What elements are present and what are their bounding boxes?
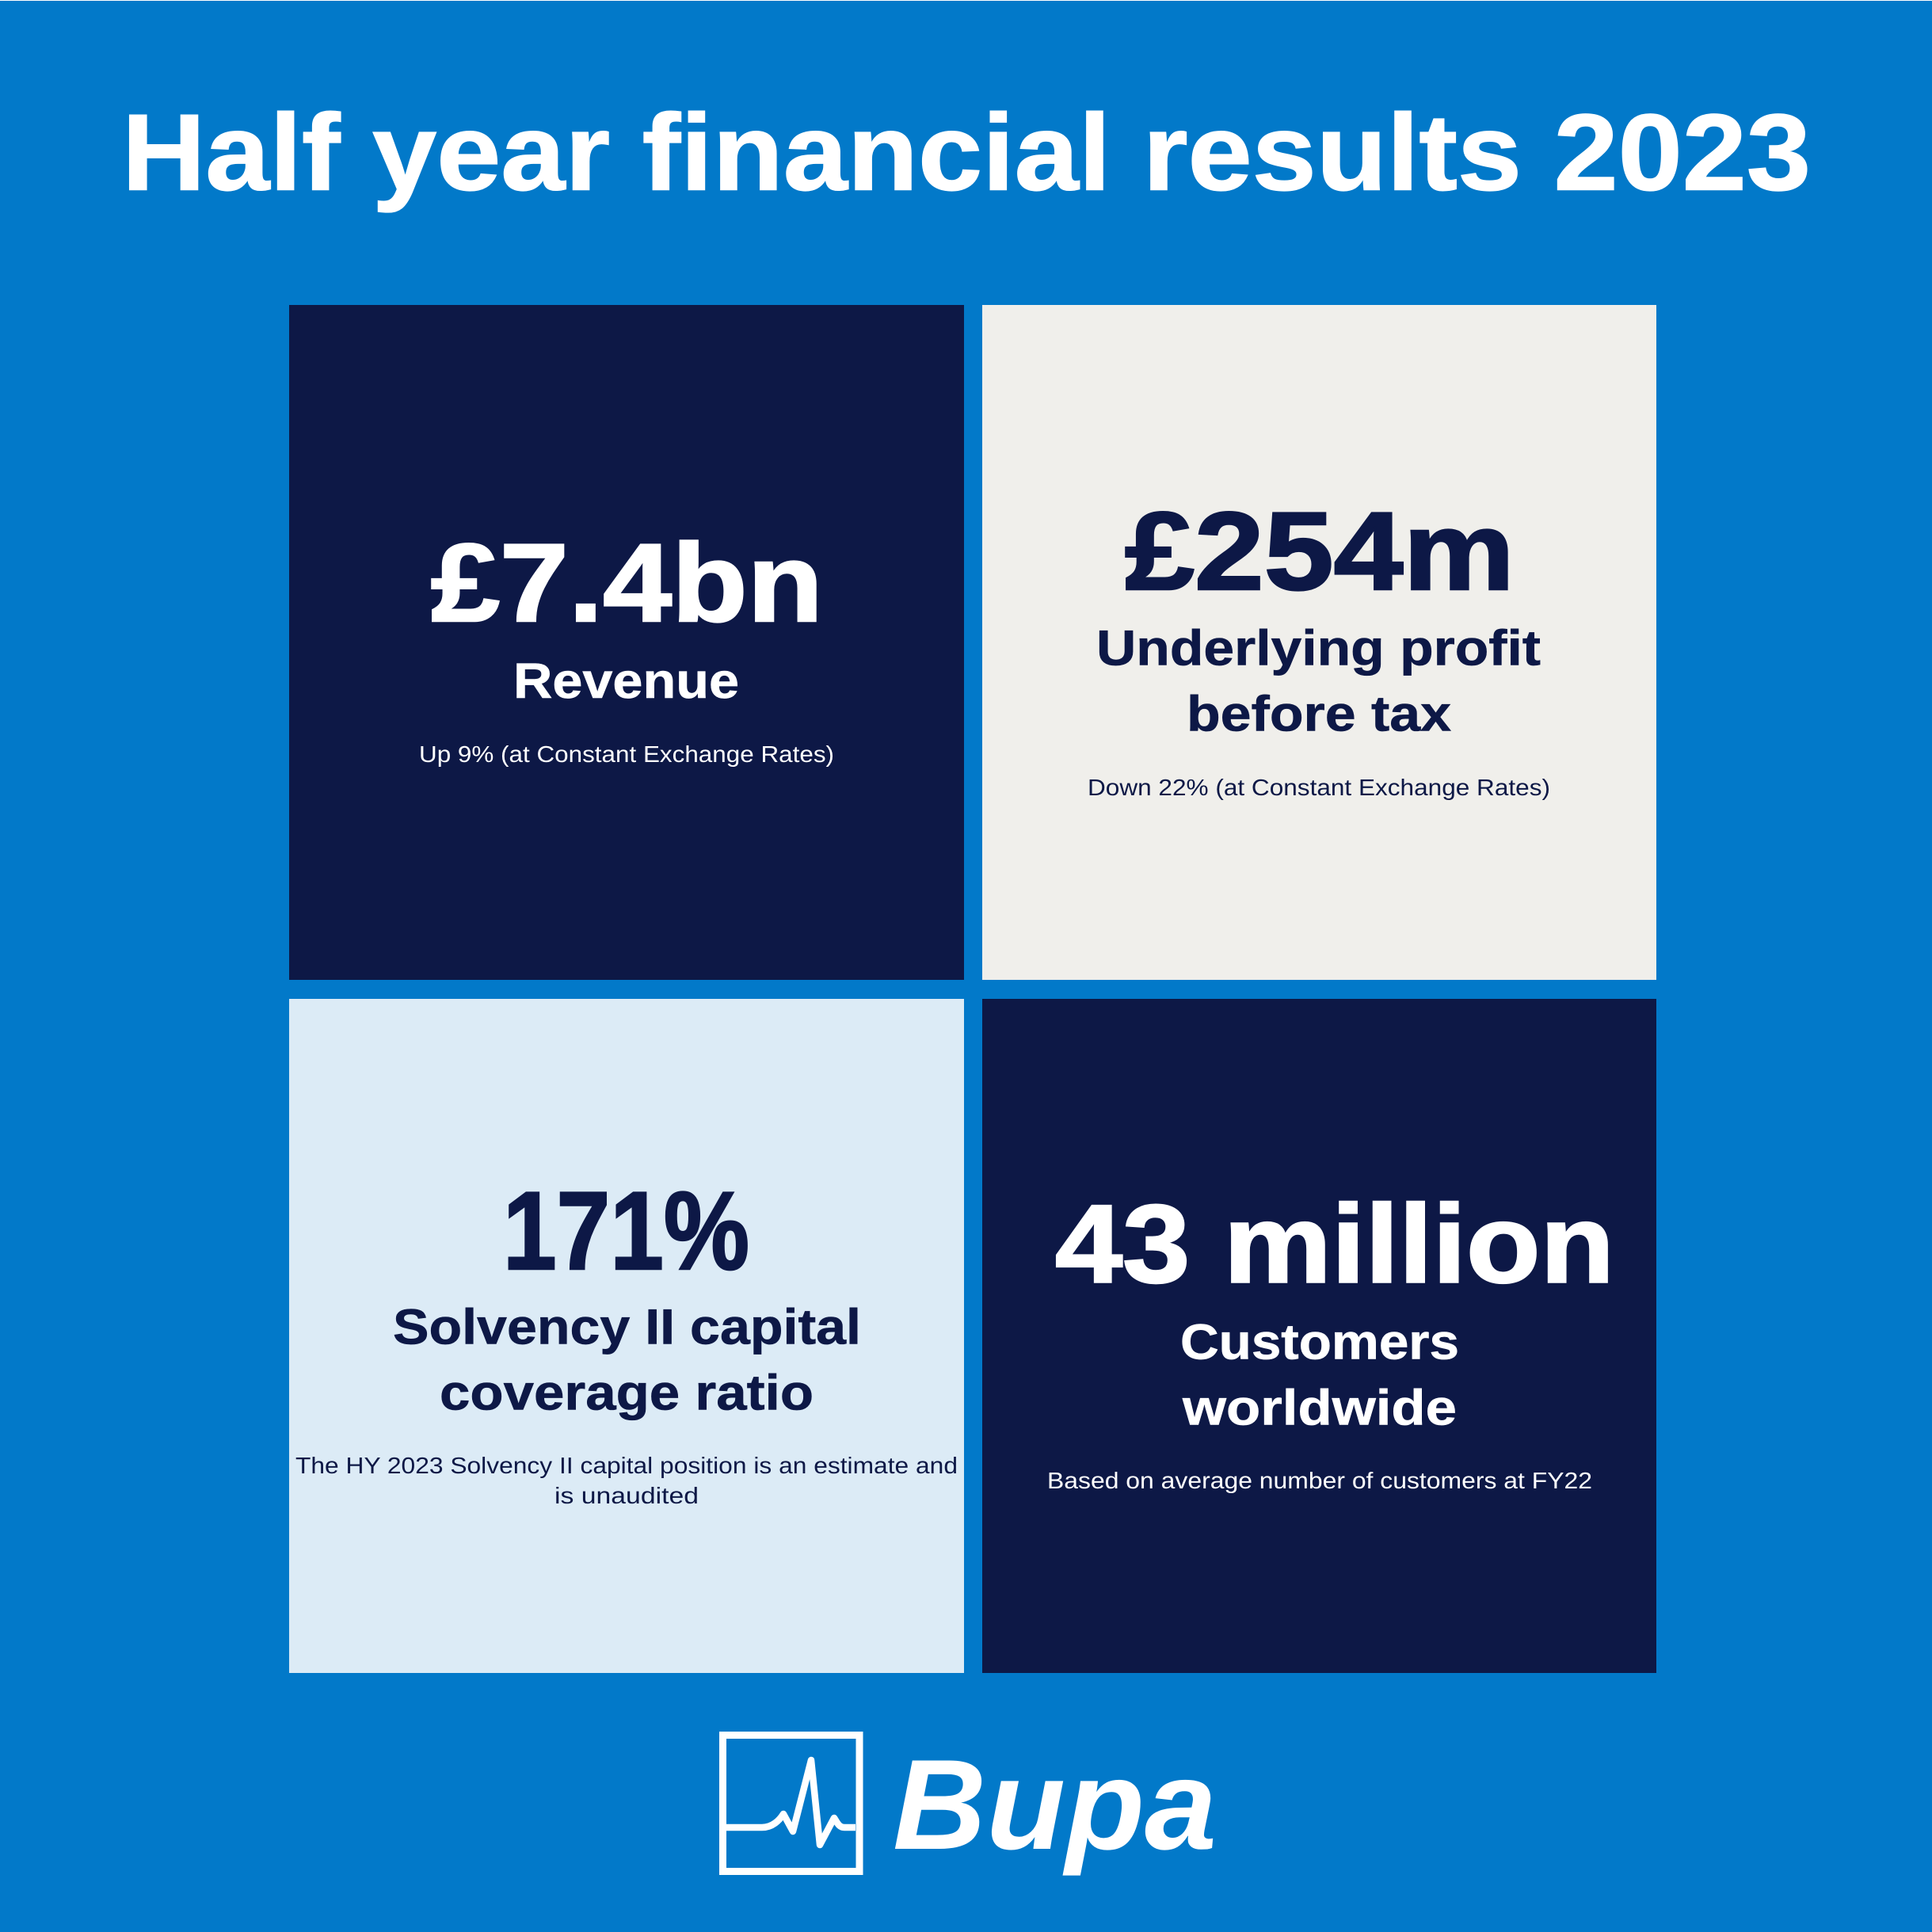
solvency note — [295, 1454, 958, 1509]
customers label: worldwide — [1182, 1380, 1457, 1435]
panel: solvency — [289, 999, 964, 1673]
profit note: Down 22% (at Constant Exchange Rates) — [1088, 775, 1550, 801]
customers note: Based on average number of customers at FY22 — [1047, 1469, 1592, 1494]
profit label — [1096, 621, 1541, 741]
panel: revenue — [289, 305, 964, 980]
customers label: Customers — [1180, 1315, 1459, 1370]
icon: pulse box — [722, 1735, 859, 1871]
customers label — [1180, 1315, 1459, 1435]
solvency label — [393, 1299, 861, 1421]
customers figure: 43 million — [1055, 1182, 1614, 1305]
solvency note: The HY 2023 Solvency II capital position is an estimate and — [295, 1454, 958, 1479]
revenue label: Revenue — [513, 654, 739, 709]
solvency label: Solvency II capital — [393, 1299, 861, 1355]
panel: customers — [982, 999, 1656, 1673]
revenue figure: £7.4bn — [431, 520, 823, 645]
profit label: before tax — [1187, 686, 1451, 741]
profit label: Underlying profit — [1096, 621, 1541, 676]
revenue note: Up 9% (at Constant Exchange Rates) — [419, 742, 834, 768]
panel: underlying profit — [982, 305, 1656, 980]
title: Half year financial results 2023 — [122, 92, 1811, 214]
logo: Bupa — [722, 1733, 1217, 1877]
solvency label: coverage ratio — [440, 1366, 814, 1421]
profit figure: £254m — [1125, 489, 1515, 613]
wordmark: Bupa — [893, 1733, 1217, 1877]
solvency figure: 171% — [503, 1168, 749, 1293]
solvency note: is unaudited — [554, 1484, 699, 1509]
